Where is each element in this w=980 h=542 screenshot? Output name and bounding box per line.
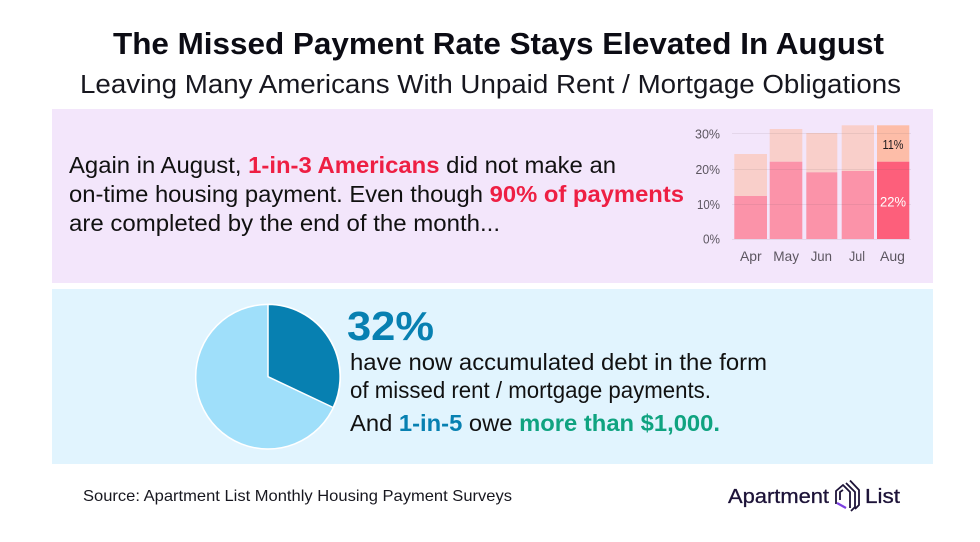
text block: August summary: Again in August, 1-in-3 Americans did not make an (69, 152, 616, 178)
text block: August summary: are completed by the end of the month... (69, 210, 500, 236)
axis labels (695, 126, 720, 246)
text block: debt description: And 1-in-5 owe more than $1,000. (350, 410, 720, 436)
text block: debt description (350, 349, 767, 436)
axis labels: 10% (697, 197, 720, 212)
text block: August summary: on-time housing payment. Even though 90% of payments (69, 181, 684, 207)
value label: 11%: 11% (882, 137, 904, 152)
axis labels: 30% (695, 126, 720, 142)
bars: Jul (842, 125, 874, 239)
title: The Missed Payment Rate Stays Elevated In August (113, 26, 884, 61)
icon: building logo (836, 480, 859, 511)
month labels: Jun (811, 248, 832, 264)
logo wordmark right: List (865, 486, 900, 508)
bars: Jun (806, 133, 837, 239)
subtitle: Leaving Many Americans With Unpaid Rent / Mortgage Obligations (80, 71, 901, 99)
month labels: Jul (849, 248, 865, 264)
pie chart: 32% with debt (196, 304, 340, 449)
big number: 32%: 32% (347, 303, 434, 349)
axis labels: 20% (696, 162, 720, 177)
bar chart: missed payment rate by month (695, 125, 911, 264)
month labels: Apr (740, 248, 762, 264)
axis labels: 0% (703, 232, 720, 246)
bars: May (770, 129, 802, 239)
logo: Apartment List (728, 480, 900, 511)
text block: August summary (69, 152, 684, 236)
month labels: May (773, 248, 799, 264)
bars: Aug (877, 125, 909, 239)
value label: 22%: 22% (880, 194, 906, 210)
logo wordmark left: Apartment (728, 486, 829, 508)
month labels (740, 248, 905, 264)
text block: debt description: of missed rent / mortgage payments. (350, 377, 711, 403)
panel: on-time payments (52, 109, 933, 283)
text block: debt description: have now accumulated debt in the form (350, 349, 767, 375)
month labels: Aug (880, 248, 905, 264)
source note: Source: Apartment List Monthly Housing Payment Surveys (83, 488, 512, 505)
bars: Apr (734, 154, 767, 239)
panel: accumulated debt (52, 289, 933, 464)
